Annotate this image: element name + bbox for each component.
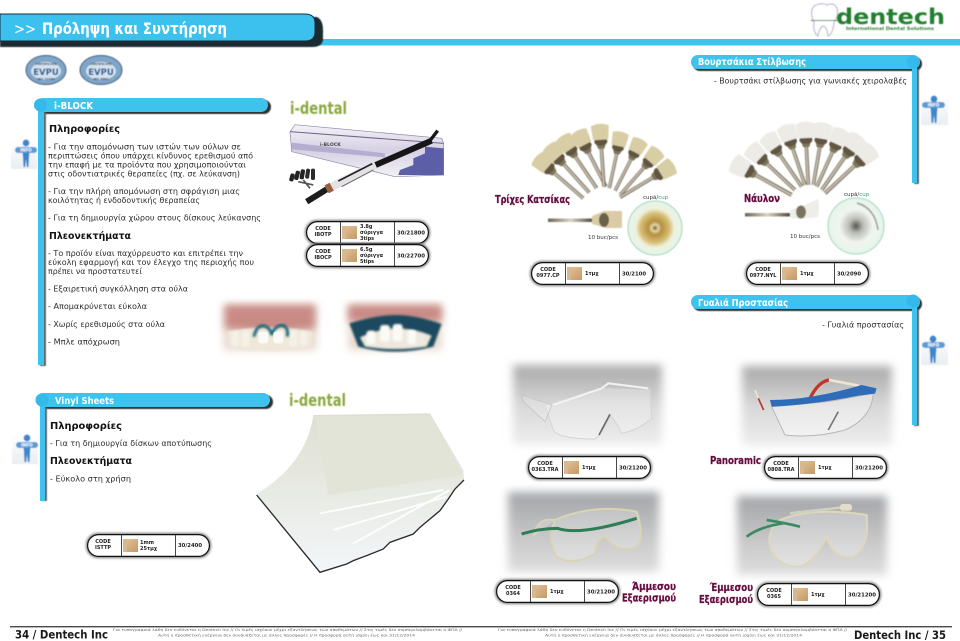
product table: 0363.TRA <box>527 455 652 480</box>
product table: IBOCP: IBOCP <box>314 255 332 261</box>
product table: 0365: 0365 <box>767 594 781 600</box>
label: goat hair: Τρίχες Κατσίκας <box>495 194 570 206</box>
icon: info person: INFO <box>21 443 33 448</box>
product table: 0808.TRA: 1τμχ <box>818 465 832 471</box>
product table: IBOCP: 5tips <box>360 259 374 265</box>
text block: information: - Για τη δημιουργία χώρου στους δίσκους λεύκανσης <box>48 212 261 222</box>
text block: information: στις οδοντιατρικές θεραπείες (πχ. σε λεύκανση) <box>48 168 240 178</box>
panel: i-BLOCK <box>11 98 444 366</box>
product table: 0364: 1τμχ <box>550 589 564 595</box>
disclaimer right: Για τυπογραφικά λάθη δεν ευθύνεται η Dentech Inc // Οι τιμές ισχύουν μέχρι εξαντλήσεως των αποθεμάτων // Στις τιμές δεν συμπεριλαμβάνεται ο ΦΠΑ // <box>498 628 848 632</box>
label: indirect ventilation: Εξαερισμού <box>699 594 753 606</box>
product table: 0808.TRA: 0808.TRA <box>768 467 795 473</box>
section heading: i-BLOCK: i-BLOCK <box>54 101 94 112</box>
header band <box>0 14 960 47</box>
text block: vinyl information: - Για τη δημιουργία δίσκων αποτύπωσης <box>50 438 212 448</box>
product photo: vinyl sheets <box>257 413 464 572</box>
product table: ISTTP: CODE <box>95 539 111 545</box>
label: direct ventilation: Εξαερισμού <box>622 592 676 604</box>
text block: information: την επαφή με τα προϊόντα που χρησιμοποιούνται <box>48 160 246 170</box>
text block: advantages: - Εξαιρετική συγκόλληση στα ούλα <box>48 284 188 294</box>
badge: EVPU ISO 9001 <box>80 56 122 84</box>
disclaimer right <box>498 628 848 638</box>
product table: 0977.NYL: CODE <box>755 267 771 273</box>
product table: 0977.CP <box>530 261 655 286</box>
label: direct ventilation <box>622 581 676 604</box>
product photo: i-BLOCK syringe and box <box>289 125 444 202</box>
product table: ISTTP: 30/2400 <box>178 543 203 549</box>
photo: single goat hair brush and cup: cupă/cup <box>643 195 669 201</box>
photo: panoramic glasses <box>742 366 892 446</box>
photo: single nylon brush and cup: cupă/cup <box>844 192 870 198</box>
text block: information: - Για την απομόνωση των ιστών των ούλων σε <box>48 142 241 152</box>
text block: advantages: - Απομακρύνεται εύκολα <box>48 301 147 311</box>
photo: goat hair brush fan <box>530 123 679 205</box>
product table: IBOTP: 3tips <box>360 236 374 242</box>
product table: IBOCP: 30/22700 <box>397 254 426 260</box>
product table: 0364: 0364 <box>506 591 520 597</box>
text: protective glasses description: - Γυαλιά προστασίας <box>822 320 904 330</box>
photo: blue gum barrier on full arch <box>348 305 442 352</box>
product table: 0365 <box>756 582 881 607</box>
badge: EVPU ISO 13485 <box>26 56 66 84</box>
disclaimer left: Αυτή η προσθετική ενέργεια δεν συνδυάζεται με άλλες προσφορές // Η προσφορά αυτή ισχύει έως και 31/12/2014 <box>158 634 415 638</box>
logo: dentech: International Dental Solutions <box>846 26 934 32</box>
product table: 0363.TRA: 0363.TRA <box>532 467 559 473</box>
product table: IBOTP: 30/21800 <box>397 230 426 236</box>
title: Πρόληψη και Συντήρηση <box>42 20 227 38</box>
product table: 0363.TRA: CODE <box>537 461 553 467</box>
text block: advantages: Πλεονεκτήματα <box>49 230 131 242</box>
product table: IBOCP: 6.5g <box>360 247 373 253</box>
label: nylon: Νάυλον <box>744 193 780 205</box>
disclaimer left: Για τυπογραφικά λάθη δεν ευθύνεται η Dentech Inc // Οι τιμές ισχύουν μέχρι εξαντλήσεως των αποθεμάτων // Στις τιμές δεν συμπεριλαμβάνεται ο ΦΠΑ // <box>113 628 463 632</box>
photo: single nylon brush and cup: 10 buc/pcs <box>790 234 820 240</box>
text block: advantages: - Μπλε απόχρωση <box>48 336 120 346</box>
label: panoramic: Panoramic <box>710 455 761 467</box>
label: direct ventilation: Άμμεσου <box>632 581 676 593</box>
product table: IBOTP: 3.8g <box>360 224 373 230</box>
certificate badges <box>26 56 122 84</box>
product table: IBOCP: CODE <box>315 249 331 255</box>
text block: advantages: - Το προϊόν είναι παχύρρευστο και επιτρέπει την <box>48 248 243 258</box>
icon: info person: INFO <box>20 148 32 153</box>
product table: 0977.NYL <box>745 261 870 286</box>
product table: 0808.TRA: 30/21200 <box>855 466 884 472</box>
text block: vinyl information <box>50 420 212 484</box>
product table: 0364: CODE <box>505 585 521 591</box>
product table: 0977.CP: 1τμχ <box>585 271 599 277</box>
section heading: polishing brushes <box>691 55 922 184</box>
product table: 0365: CODE <box>766 588 782 594</box>
panel: Vinyl Sheets <box>12 391 464 572</box>
icon: info person: INFO <box>928 103 940 108</box>
panel: polishing brushes <box>495 55 948 286</box>
text block: information: περιπτώσεις όπου υπάρχει κίνδυνος ερεθισμού από <box>48 150 253 160</box>
product table: IBOCP <box>305 243 430 268</box>
product table: ISTTP: 1mm <box>140 540 154 546</box>
text block: vinyl information: Πλεονεκτήματα <box>50 455 132 467</box>
icon: info person: INFO <box>928 343 940 348</box>
product table: ISTTP <box>86 533 211 558</box>
product table: IBOTP <box>305 220 430 245</box>
disclaimer right: Αυτή η προσθετική ενέργεια δεν συνδυάζεται με άλλες προσφορές // Η προσφορά αυτή ισχύει έως και 31/12/2014 <box>545 634 802 638</box>
logo: i-dental: i-dental <box>289 391 346 411</box>
photo: indirect ventilation goggles <box>737 496 887 575</box>
product table: ISTTP: ISTTP <box>95 545 111 551</box>
logo: dentech <box>811 4 945 36</box>
text block: information: - Για την πλήρη απομόνωση στη σφράγιση μιας <box>48 186 240 196</box>
text block: vinyl information: - Εύκολο στη χρήση <box>50 474 131 484</box>
product table: IBOCP: σύριγγα <box>360 252 384 259</box>
product table: 0977.CP: 30/2100 <box>622 272 647 278</box>
product table: 0363.TRA: 1τμχ <box>582 465 596 471</box>
section heading: protective glasses <box>691 294 922 426</box>
section heading: Vinyl Sheets <box>36 393 273 501</box>
product photo: i-BLOCK syringe and box: i-BLOCK <box>320 142 341 148</box>
section heading: Vinyl Sheets: Vinyl Sheets <box>55 396 114 407</box>
product table: 0808.TRA <box>763 455 888 480</box>
icon: info person <box>921 336 948 365</box>
badge: EVPU ISO 13485: CERTIFICATE <box>35 62 57 66</box>
label: indirect ventilation <box>699 582 753 606</box>
text block: advantages: πρέπει να προστατευτεί <box>48 266 142 276</box>
text: polishing brushes description: - Βουρτσάκι στίλβωσης για γωνιακές χειρολαβές <box>714 76 907 86</box>
section heading: polishing brushes: Βουρτσάκια Στίλβωσης <box>698 56 806 68</box>
badge: EVPU ISO 13485: ISO 13485 <box>37 77 55 81</box>
badge: EVPU ISO 9001: ISO 9001 <box>93 77 109 81</box>
text block: information: Πληροφορίες <box>49 123 120 135</box>
text block: advantages: εύκολη εφαρμογή και τον έλεγχο της περιοχής που <box>48 257 254 267</box>
product table: 0365: 1τμχ <box>811 592 825 598</box>
footer <box>10 626 952 641</box>
badge: EVPU ISO 9001: CERTIFICATE <box>90 62 112 66</box>
product table: 0364: 30/21200 <box>587 590 616 596</box>
text block: information: κοιλότητας ή ενδοδοντικής θεραπείας <box>48 195 200 205</box>
icon: info person <box>921 96 948 125</box>
product table: 0363.TRA: 30/21200 <box>619 466 648 472</box>
label: indirect ventilation: Έμμεσου <box>709 582 753 594</box>
badge: EVPU ISO 9001: EVPU <box>88 68 114 78</box>
product table: 0977.NYL: 0977.NYL <box>750 273 777 279</box>
product table: 0808.TRA: CODE <box>773 461 789 467</box>
badge: EVPU ISO 13485: EVPU <box>33 68 59 78</box>
product table: 0977.CP: CODE <box>540 267 556 273</box>
photo: over-glasses <box>513 365 662 445</box>
photo: direct ventilation goggles <box>508 492 659 572</box>
product table: 0365: 30/21200 <box>848 592 877 598</box>
logo: dentech: dentech <box>836 5 945 29</box>
panel: protective glasses <box>495 294 948 607</box>
product table: IBOTP: CODE <box>315 226 331 232</box>
disclaimer left <box>113 628 463 638</box>
product table: 0364 <box>495 579 620 604</box>
text block: advantages: - Χωρίς ερεθισμούς στα ούλα <box>48 319 165 329</box>
photo: blue gum barrier on two teeth <box>223 305 317 351</box>
product table: ISTTP: 25τμχ <box>140 546 158 552</box>
title: >> <box>14 20 36 38</box>
product table: 0977.CP: 0977.CP <box>536 273 560 279</box>
text block: vinyl information: Πληροφορίες <box>50 420 122 432</box>
product table: IBOTP: σύριγγα <box>360 229 384 236</box>
icon: info person <box>11 140 37 169</box>
product table: IBOTP: IBOTP <box>314 232 332 238</box>
text block: information <box>48 123 261 222</box>
photo: single goat hair brush and cup: 10 buc/pcs <box>588 235 618 241</box>
icon: info person <box>12 435 38 464</box>
product table: 0977.NYL: 1τμχ <box>800 271 814 277</box>
photo: nylon brush fan <box>727 121 881 204</box>
text block: advantages <box>48 230 254 346</box>
photo: single nylon brush and cup <box>745 192 884 254</box>
product table: 0977.NYL: 30/2090 <box>837 272 862 278</box>
logo: i-dental: i-dental <box>290 99 347 119</box>
section heading: i-BLOCK <box>34 98 271 366</box>
photo: single goat hair brush and cup <box>548 195 682 255</box>
section heading: protective glasses: Γυαλιά Προστασίας <box>698 297 788 309</box>
